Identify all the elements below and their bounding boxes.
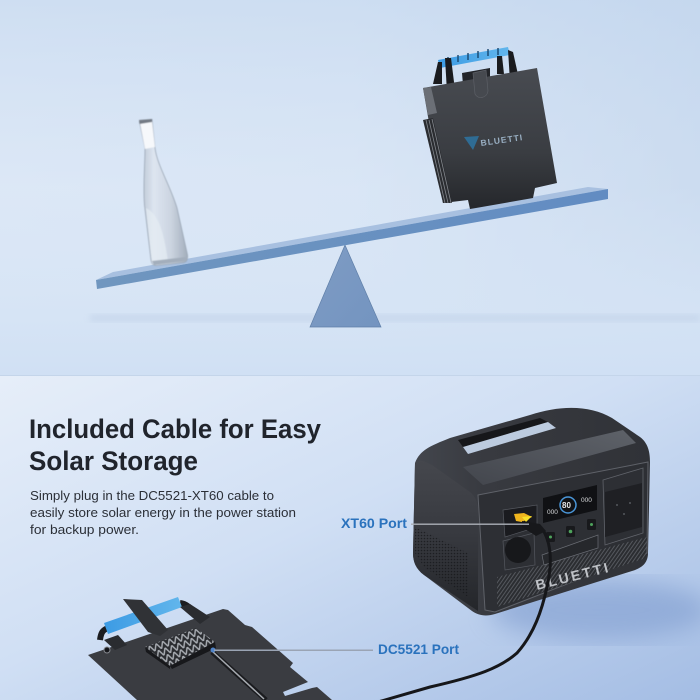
round DC socket (503, 533, 535, 570)
control buttons (546, 519, 596, 542)
callout leader: XT60 (411, 524, 529, 525)
power station (413, 408, 650, 615)
handle with blue grip (433, 47, 519, 92)
body text: Simply plug in the DC5521-XT60 cable to (30, 488, 274, 503)
left side fins (423, 87, 452, 203)
display: 000 (547, 509, 558, 516)
body text: for backup power. (30, 522, 139, 537)
carbon strip (497, 537, 647, 607)
top plate (463, 430, 636, 485)
blue handle (100, 597, 210, 650)
solar panel product (423, 47, 557, 209)
panel: top background (0, 0, 700, 376)
front panel (478, 462, 648, 612)
label: DC5521 Port: DC5521 Port (378, 641, 459, 657)
station body (413, 408, 650, 615)
label: XT60 Port: XT60 Port (341, 515, 407, 531)
XT60 plug (522, 521, 546, 536)
body text: easily store solar energy in the power station (30, 505, 296, 520)
foldable solar panel lying flat (88, 597, 332, 700)
body text (30, 488, 296, 537)
USB panel (542, 535, 598, 565)
strap tab (473, 70, 488, 98)
panel sheet (88, 609, 332, 700)
heading: Included Cable for Easy (29, 414, 321, 444)
BLUETTI logo: BLUETTI (480, 132, 524, 148)
floor shadow under power station (490, 580, 700, 640)
display: 000 (581, 497, 592, 504)
eyelet (104, 647, 110, 653)
AC socket (603, 468, 643, 545)
panel: bottom background (0, 376, 700, 700)
junction box (145, 628, 216, 669)
icon: glass bottle (139, 119, 188, 266)
display: 80 (562, 501, 571, 510)
display (543, 485, 597, 523)
panel body (423, 68, 557, 209)
seesaw plank (96, 187, 608, 289)
seesaw fulcrum triangle (310, 245, 381, 327)
heading: Solar Storage (29, 446, 198, 476)
BLUETTI logo (464, 132, 524, 150)
heading (29, 414, 321, 476)
callout leader: DC5521 (214, 650, 373, 651)
dc cable (212, 652, 266, 700)
cable from panel to station (378, 521, 550, 700)
brand name: BLUETTI (534, 559, 612, 593)
handle (458, 418, 556, 454)
XT60 recess with yellow connector (503, 505, 537, 537)
side face with speaker grille (413, 461, 478, 611)
